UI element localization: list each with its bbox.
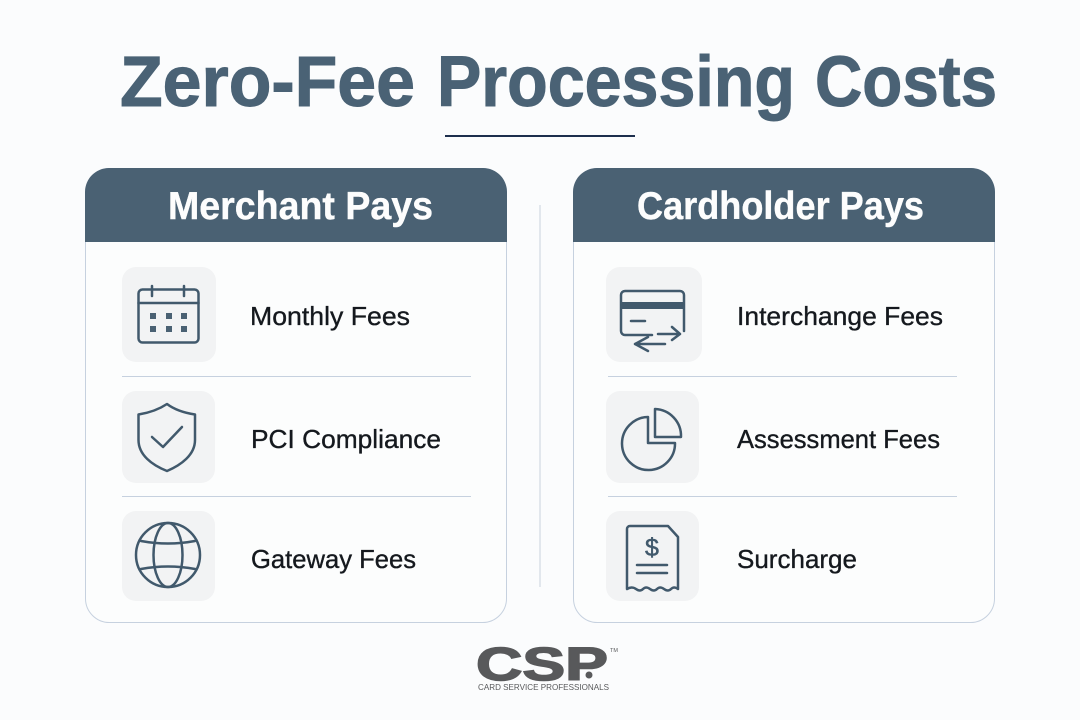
logo: CSP [476,638,618,692]
logo trademark: TM [610,648,618,654]
row: interchange fees [606,267,943,362]
label: interchange fees: Interchange Fees [737,301,943,331]
icon: shield [122,391,215,483]
center divider [540,205,541,587]
icon: pie chart [606,391,699,483]
icon: credit card [606,267,702,362]
heading: cardholder pays: Cardholder Pays [637,185,924,228]
icon: globe [122,511,215,601]
title underline [445,135,635,137]
row: monthly fees [122,267,410,362]
icon: receipt: $ [645,534,659,562]
heading: merchant pays: Merchant Pays [168,185,433,228]
icon: receipt [606,511,699,601]
logo dot [585,671,593,679]
logo tagline: CARD SERVICE PROFESSIONALS [478,682,609,692]
panel header [85,168,507,242]
title: Processing [437,43,795,122]
row: surcharge [606,511,857,601]
row: assessment fees [606,391,940,483]
row: pci compliance [122,391,441,483]
panel: merchant pays [85,168,507,622]
panel body [574,168,994,622]
label: pci compliance: PCI Compliance [251,424,441,454]
label: surcharge: Surcharge [737,544,857,574]
panel body [86,168,506,622]
label: monthly fees: Monthly Fees [250,301,410,331]
title: Costs [815,43,997,122]
label: gateway fees: Gateway Fees [251,544,416,574]
row: gateway fees [122,511,416,601]
icon: calendar [122,267,216,362]
panel: cardholder pays [573,168,995,622]
panel header [573,168,995,242]
title: Zero-Fee [120,43,415,122]
label: assessment fees: Assessment Fees [737,424,940,454]
logo wordmark: CSP [476,638,608,690]
